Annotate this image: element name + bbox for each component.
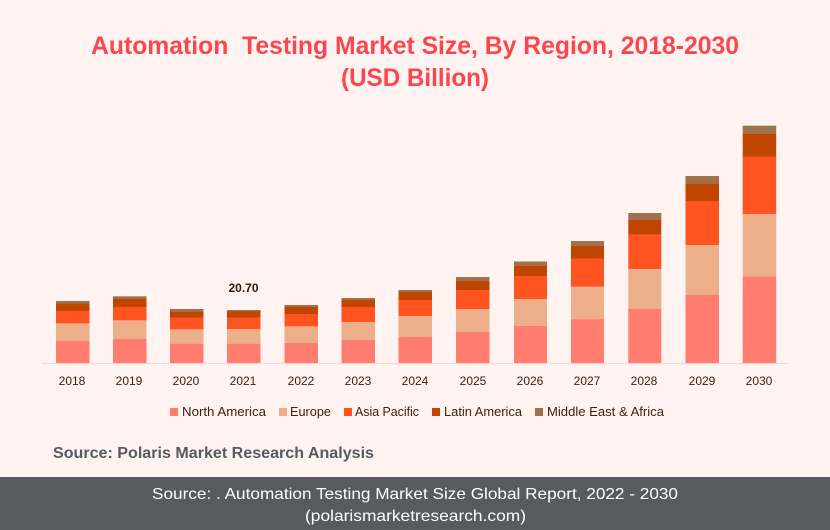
bar 2029 (686, 176, 719, 363)
year axis labels: 2027 (574, 374, 601, 388)
year axis labels: 2028 (631, 374, 658, 388)
footer band (0, 477, 830, 530)
source note: Source: Polaris Market Research Analysis (53, 445, 374, 462)
title: Automation Testing Market Size, By Region, 2018-2030 (91, 32, 739, 60)
year axis labels: 2030 (746, 374, 773, 388)
year axis labels: 2022 (288, 374, 315, 388)
bar 2023 (342, 298, 375, 363)
legend (170, 405, 664, 419)
year axis labels: 2025 (460, 374, 487, 388)
footer band: (polarismarketresearch.com) (305, 508, 526, 525)
year axis labels: 2018 (59, 374, 86, 388)
year axis labels: 2024 (402, 374, 429, 388)
year axis labels: 2021 (230, 374, 257, 388)
year axis labels (59, 374, 773, 388)
stacked bar chart (42, 126, 788, 388)
legend: Asia Pacific (355, 405, 419, 419)
bar 2030 (743, 126, 776, 363)
year axis labels: 2023 (345, 374, 372, 388)
legend: Latin America (444, 405, 522, 419)
bar 2021 (227, 310, 260, 363)
year axis labels: 2029 (689, 374, 716, 388)
legend: Middle East & Africa (547, 405, 664, 419)
bar 2020 (170, 309, 204, 363)
bar 2024 (398, 290, 432, 363)
year axis labels: 2026 (517, 374, 544, 388)
bar 2018 (56, 301, 90, 363)
bar 2022 (284, 305, 318, 363)
year axis labels: 2019 (116, 374, 143, 388)
bar 2026 (514, 262, 547, 363)
bar 2028 (628, 213, 661, 363)
value label 2021: 20.70 (228, 281, 259, 295)
title: (USD Billion) (341, 64, 489, 92)
bar 2019 (113, 296, 146, 363)
bar 2027 (571, 241, 604, 363)
year axis labels: 2020 (173, 374, 200, 388)
legend: Europe (290, 405, 331, 419)
bar 2025 (456, 277, 490, 363)
title (91, 32, 739, 92)
footer band: Source: . Automation Testing Market Size Global Report, 2022 - 2030 (152, 486, 678, 503)
legend: North America (182, 405, 266, 419)
